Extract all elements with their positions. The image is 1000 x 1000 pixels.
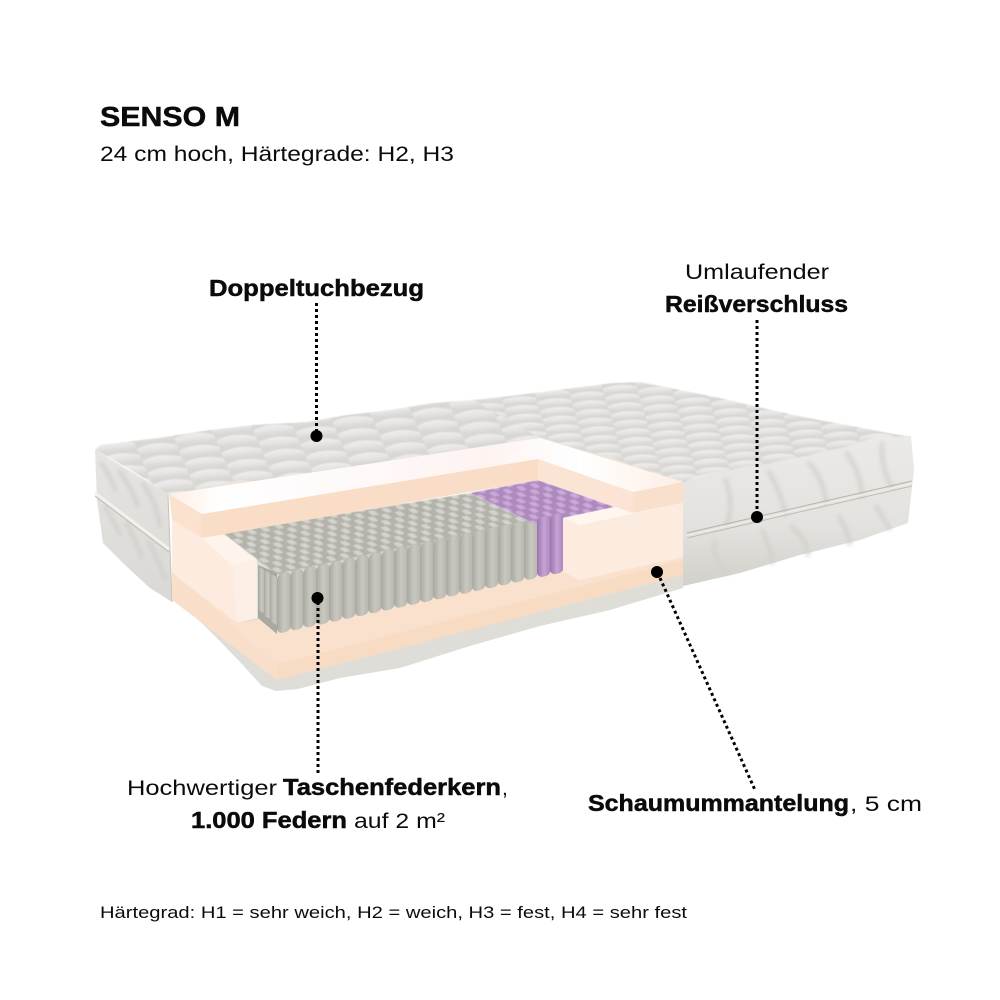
- label: Taschenfederkern: ,: [502, 777, 508, 800]
- footnote: Härtegrad: H1 = sehr weich, H2 = weich, H3 = fest, H4 = sehr fest: [100, 903, 687, 922]
- left side face: [95, 450, 172, 602]
- right foam block: [563, 503, 683, 580]
- label: Taschenfederkern: Hochwertiger: [127, 777, 277, 800]
- top foam slab: [169, 438, 683, 538]
- label: Reißverschluss: Reißverschluss: [665, 291, 848, 317]
- bottom cover: [172, 560, 683, 691]
- label: Reißverschluss: [665, 261, 848, 523]
- right side face: [683, 434, 914, 586]
- label: Schaumummantelung: Schaumummantelung: [588, 790, 849, 816]
- pocket spring core, purple section: [470, 480, 615, 578]
- label: Doppeltuchbezug: Doppeltuchbezug: [209, 275, 424, 301]
- label: Taschenfederkern: 1.000 Federn: [191, 807, 347, 833]
- label: Taschenfederkern: auf 2 m²: [354, 810, 445, 833]
- label: Doppeltuchbezug: [209, 275, 424, 442]
- label: Taschenfederkern: Taschenfederkern: [283, 774, 501, 800]
- label: Schaumummantelung: , 5 cm: [850, 793, 922, 816]
- left foam wall: [172, 520, 257, 623]
- label: Reißverschluss: Umlaufender: [685, 261, 829, 284]
- pocket spring core, grey section: [223, 493, 538, 634]
- label: Schaumummantelung: [588, 566, 922, 816]
- title: SENSO M: [100, 101, 240, 132]
- cut edge of cover: [170, 437, 683, 497]
- bottom foam slab: [172, 540, 683, 680]
- label: Taschenfederkern: [127, 592, 508, 833]
- quilted top cover: [95, 382, 904, 496]
- mattress illustration: [90, 375, 920, 691]
- subtitle: 24 cm hoch, Härtegrade: H2, H3: [100, 143, 454, 166]
